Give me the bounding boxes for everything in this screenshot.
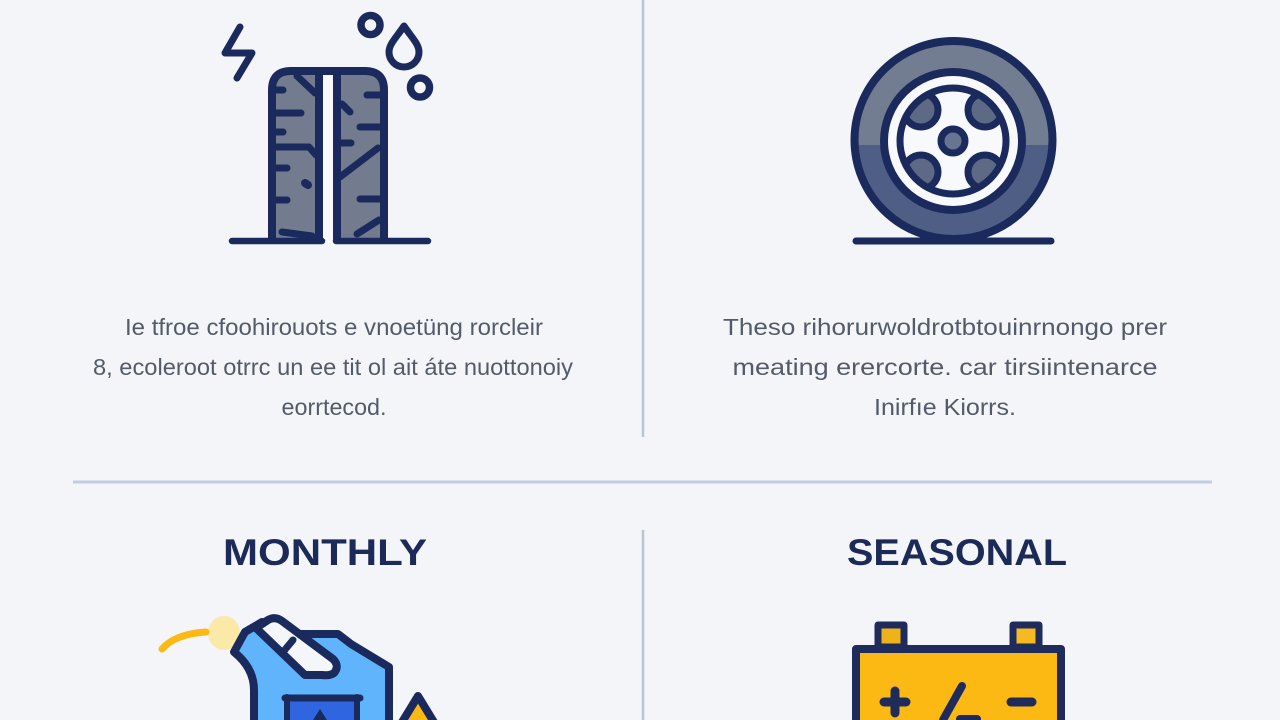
text block: right description: meating erercorte. car tirsiintenarce — [732, 354, 1158, 380]
icon: car battery — [856, 625, 1061, 720]
text block: left description — [93, 314, 574, 420]
text block: left description: 8, ecoleroot otrrc un ee tit ol ait áte nuottonoiy — [93, 354, 574, 380]
heading: monthly: MONTHLY — [223, 532, 427, 573]
heading: seasonal: SEASONAL — [847, 532, 1067, 573]
text block: left description: Ie tfroe cfoohirouots e vnoetüng rorcleir — [125, 314, 543, 340]
text block: left description: eorrtecod. — [282, 394, 386, 420]
icon: flat tire wheel — [854, 41, 1052, 241]
text block: right description — [723, 314, 1167, 420]
text block: right description: Theso rihorurwoldrotbtouinrnongo prer — [723, 314, 1167, 340]
icon: worn tire tread with lightning and water drops — [225, 16, 430, 242]
text block: right description: Inirfıe Kiorrs. — [874, 394, 1016, 420]
icon: oil jerry can with warning triangle — [162, 616, 440, 720]
